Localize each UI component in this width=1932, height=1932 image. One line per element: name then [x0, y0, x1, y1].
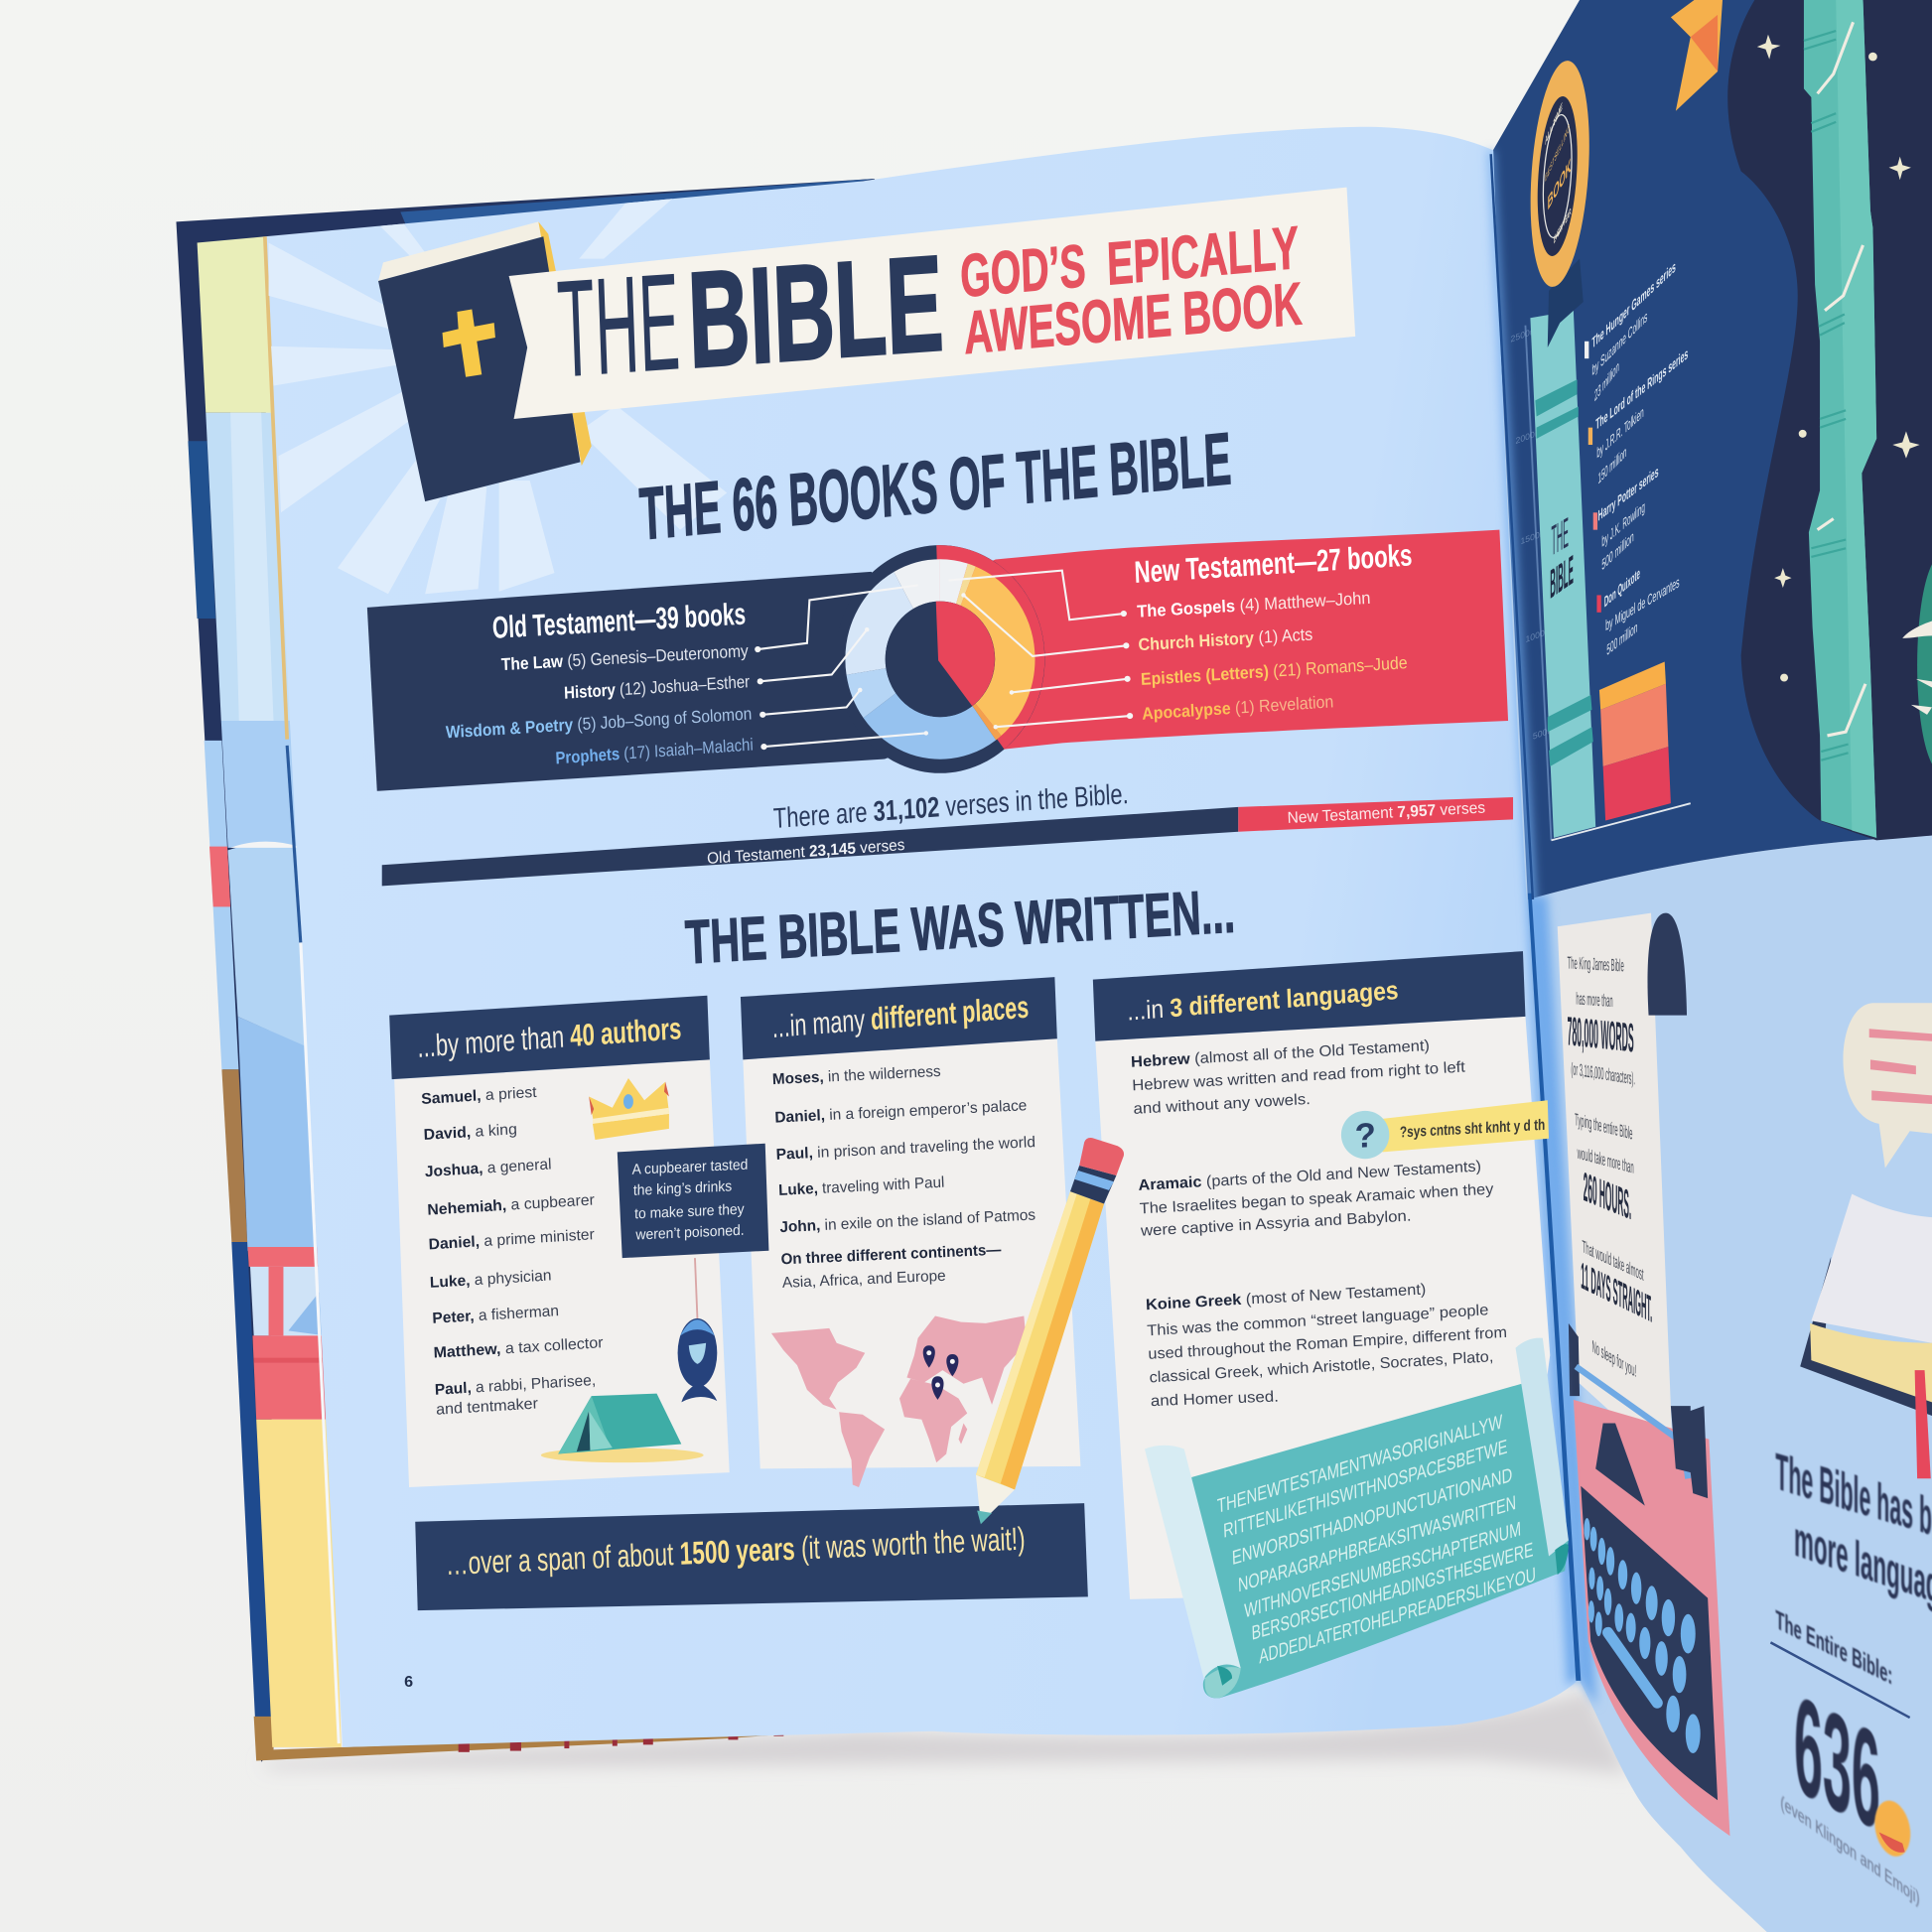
koine greek paragraph: classical Greek, which Aristotle, Socrates, Plato, [1149, 1348, 1494, 1386]
callout: cupbearer note: A cupbearer tasted [632, 1158, 748, 1178]
list of authors [421, 1084, 604, 1419]
new testament labels: Apocalypse (1) Revelation [1142, 691, 1334, 724]
callout: cupbearer note: to make sure they [634, 1202, 745, 1222]
chart legend: 500 million [1606, 619, 1637, 659]
verse count: There are 31,102 verses in the Bible. [772, 778, 1129, 835]
bar chart: bestselling books, Bible spine: 500m [1533, 724, 1555, 742]
callout: cupbearer note [618, 1144, 768, 1258]
speech bubble [1843, 1003, 1932, 1169]
verse bar: old vs new testament: Old Testament 23,145 verses [707, 836, 905, 868]
bar chart: bestselling books, Bible spine [1511, 311, 1691, 840]
list of places: On three different continents— [780, 1242, 1002, 1268]
koine greek paragraph: used throughout the Roman Empire, different from [1148, 1324, 1507, 1363]
aramaic paragraph: Aramaic (parts of the Old and New Testaments) [1138, 1159, 1481, 1194]
panel: in 3 different languages: ...in 3 different languages [1127, 975, 1399, 1027]
old testament labels: Prophets (17) Isaiah–Malachi [555, 734, 754, 767]
new testament labels: New Testament—27 books [1134, 537, 1413, 590]
chart legend: 500 million [1601, 527, 1634, 574]
new testament labels: Epistles (Letters) (21) Romans–Jude [1141, 652, 1408, 689]
no-vowels banner with question mark: ?sys cntns sht knht y d th [1400, 1117, 1545, 1142]
scroll of paper with typing facts: Typing the entire Bible [1575, 1109, 1632, 1144]
no-vowels banner with question mark: ? [1354, 1117, 1376, 1156]
chart legend: 23 million [1594, 357, 1619, 405]
old testament labels [446, 597, 754, 767]
list of authors: Matthew, a tax collector [433, 1334, 604, 1362]
bottom banner: span of 1500 years [415, 1503, 1088, 1610]
scroll text lines: ADDEDLATERTOHELPREADERSLIKEYOU [1259, 1564, 1536, 1668]
list of places [772, 1063, 1036, 1292]
open book illustration [1800, 1194, 1932, 1478]
heading: the bible was written: THE BIBLE WAS WRITTEN... [684, 878, 1236, 978]
callout: cupbearer note: the king’s drinks [633, 1179, 732, 1199]
scroll of paper with typing facts: That would take almost [1583, 1236, 1644, 1285]
list of authors: Peter, a fisherman [432, 1303, 559, 1327]
bottom banner: span of 1500 years: …over a span of about 1500 years (it was worth the wait!) [445, 1521, 1026, 1582]
list of authors: David, a king [423, 1121, 517, 1144]
right page: dark blue bestsellers section [1491, 0, 1932, 899]
donut chart band: Old and New Testament [367, 530, 1508, 791]
callout: cupbearer note: weren’t poisoned. [634, 1223, 745, 1244]
aramaic paragraph: were captive in Assyria and Babylon. [1140, 1208, 1412, 1240]
world map with pins [771, 1315, 1027, 1487]
title banner [509, 188, 1355, 419]
scroll of paper with typing facts: The King James Bible [1568, 952, 1624, 975]
list of authors: Samuel, a priest [421, 1084, 538, 1108]
panel: by more than 40 authors [389, 996, 730, 1487]
list of places: Asia, Africa, and Europe [782, 1268, 946, 1292]
koine greek paragraph: Koine Greek (most of New Testament) [1146, 1281, 1427, 1313]
page number: 6 [404, 1673, 413, 1691]
left page [265, 127, 1580, 1747]
old testament labels: Old Testament—39 books [491, 597, 747, 645]
list of authors: and tentmaker [436, 1395, 538, 1419]
award badge: BOOK [1548, 154, 1571, 215]
scroll text lines: NOPARAGRAPHBREAKSITWASWRITTEN [1238, 1492, 1516, 1596]
chart legend: by Suzanne Collins [1591, 307, 1647, 379]
hebrew paragraph: Hebrew was written and read from right to left [1132, 1059, 1466, 1094]
chart legend: 150 million [1598, 442, 1626, 487]
list of authors: Daniel, a prime minister [428, 1226, 595, 1253]
icon: tent [541, 1394, 704, 1462]
aramaic paragraph: The Israelites began to speak Aramaic when they [1139, 1180, 1494, 1217]
new testament labels [1134, 537, 1413, 724]
list of places: Daniel, in a foreign emperor’s palace [774, 1097, 1028, 1127]
verse bar: old vs new testament: New Testament 7,957 verses [1287, 799, 1485, 827]
scroll text lines: THENEWTESTAMENTWASORIGINALLYW [1217, 1411, 1503, 1518]
night-sky blob with book tower [1727, 0, 1932, 840]
bar chart: bestselling books, Bible spine: 1500m [1520, 527, 1547, 546]
list of places: Moses, in the wilderness [772, 1063, 941, 1088]
bar chart: bestselling books, Bible spine: THE [1552, 508, 1569, 565]
chart legend [1585, 257, 1688, 659]
bar chart: bestselling books, Bible spine: 2000m [1516, 427, 1542, 446]
chart legend: by Miguel de Cervantes [1605, 574, 1680, 634]
list of places: Luke, traveling with Paul [778, 1174, 945, 1199]
icon: crown [589, 1078, 669, 1140]
award badge: EVERY YEAR [1554, 206, 1571, 246]
panel: in many different places [741, 977, 1080, 1487]
scroll text lines: BERSORSECTIONHEADINGSTHESEWERE [1251, 1539, 1534, 1645]
list of places: John, in exile on the island of Patmos [779, 1206, 1036, 1236]
list of authors: Paul, a rabbi, Pharisee, [435, 1372, 596, 1399]
chart legend: Don Quixote [1604, 564, 1640, 611]
icon: gold cross [443, 310, 495, 377]
scroll of paper with typing facts [1558, 913, 1687, 1468]
right page: lower light-blue section: 260 HOURS. [1584, 1164, 1631, 1229]
scroll text lines: WITHNOVERSENUMBERSCHAPTERNUM [1244, 1518, 1521, 1622]
bar chart: bestselling books, Bible spine: 2500m [1511, 325, 1537, 345]
new testament labels: Church History (1) Acts [1138, 623, 1313, 654]
list of authors: Nehemiah, a cupbearer [427, 1191, 595, 1219]
no-vowels banner with question mark [1341, 1100, 1549, 1159]
title banner: GOD’S [959, 231, 1087, 310]
scroll of paper with typing facts: would take more than [1577, 1143, 1634, 1177]
title banner: AWESOME BOOK [963, 269, 1304, 366]
scroll with greek text [1145, 1338, 1569, 1698]
award badge: ALL TIME [1545, 99, 1563, 148]
old testament labels: History (12) Joshua–Esther [564, 671, 751, 703]
icon: pencil [976, 1138, 1124, 1524]
hebrew paragraph: and without any vowels. [1133, 1091, 1311, 1118]
typewriter [1569, 1323, 1729, 1836]
scroll of paper with typing facts: has more than [1576, 988, 1613, 1011]
new testament labels: The Gospels (4) Matthew–John [1137, 588, 1371, 621]
new testament band [949, 530, 1508, 750]
ribbon [1671, 0, 1723, 111]
scroll of paper with typing facts: (or 3,116,000 characters). [1571, 1058, 1635, 1088]
bar chart: bestselling books, Bible spine: 1000m [1525, 625, 1552, 644]
panel: by more than 40 authors: ...by more than 40 authors [417, 1011, 682, 1064]
bar chart: bestselling books, Bible spine: BIBLE [1550, 546, 1574, 608]
right page: lower light-blue section: 11 DAYS STRAIGHT. [1581, 1255, 1652, 1331]
scroll text lines: RITTENLIKETHISWITHNOSPACESBETWE [1223, 1436, 1508, 1543]
inner endpaper strip with lighthouse scene [198, 236, 342, 1747]
icon: holy bible book [378, 221, 592, 501]
list of places: Paul, in prison and traveling the world [775, 1134, 1035, 1164]
hebrew paragraph [1131, 1037, 1466, 1118]
old testament labels: Wisdom & Poetry (5) Job–Song of Solomon [446, 704, 753, 742]
chart legend: The Hunger Games series [1591, 257, 1676, 352]
title banner: BIBLE [686, 226, 945, 396]
koine greek paragraph [1146, 1281, 1507, 1410]
scroll text lines [1217, 1411, 1536, 1668]
right page: lower light-blue section [1528, 835, 1932, 1932]
list of authors: Joshua, a general [425, 1156, 552, 1180]
icon: fish on line [678, 1258, 717, 1402]
award badge: BESTSELLING [1545, 121, 1570, 185]
title banner: EPICALLY [1106, 213, 1300, 298]
verse bar: old vs new testament [382, 797, 1513, 886]
book cover edge [176, 179, 875, 1762]
heading: the 66 books: THE 66 BOOKS OF THE BIBLE [637, 417, 1233, 556]
koine greek paragraph: This was the common “street language” people [1147, 1302, 1489, 1339]
leader lines [758, 571, 1130, 747]
chart legend: by J.K. Rowling [1601, 497, 1645, 550]
donut chart [835, 545, 1044, 773]
old testament labels: The Law (5) Genesis–Deuteronomy [500, 640, 749, 674]
title banner: THE [555, 244, 682, 407]
panel: in 3 different languages [1093, 951, 1550, 1599]
list of authors: Luke, a physician [430, 1267, 552, 1292]
right page: dark blue bestsellers section: The Lord of the Rings series [1595, 345, 1688, 434]
panel: in many different places: ...in many different places [771, 990, 1030, 1044]
award badge [1524, 59, 1596, 347]
scroll of paper with typing facts: No sleep for you! [1591, 1336, 1636, 1381]
aramaic paragraph [1138, 1159, 1494, 1240]
chart legend: Harry Potter series [1598, 463, 1658, 525]
right page: lower light-blue section: 780,000 WORDS [1568, 1009, 1634, 1060]
koine greek paragraph: and Homer used. [1151, 1389, 1279, 1410]
hebrew paragraph: Hebrew (almost all of the Old Testament) [1131, 1037, 1430, 1071]
translations fact [1770, 1443, 1932, 1909]
sun rays behind the book [269, 173, 727, 594]
scroll text lines: ENWORDSITHADNOPUNCTUATIONAND [1231, 1464, 1513, 1570]
chart legend: by J.R.R. Tolkien [1596, 403, 1644, 462]
old testament band [367, 572, 936, 791]
